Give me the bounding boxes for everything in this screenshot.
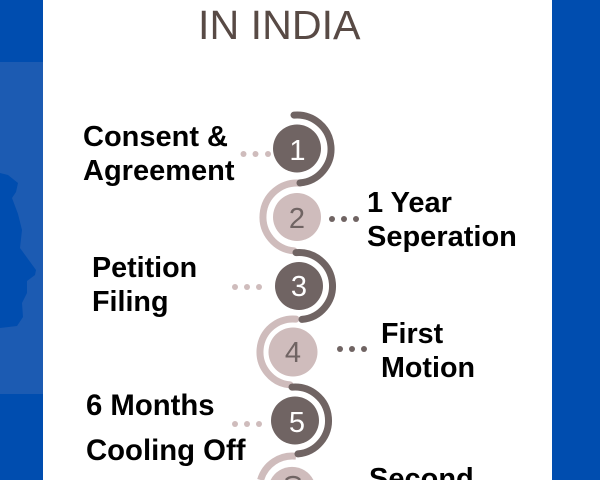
right blue background panel bbox=[552, 0, 600, 480]
step 6 arc bbox=[261, 456, 296, 480]
step 2 circle: 2 bbox=[289, 203, 305, 235]
dots step 4 bbox=[337, 346, 367, 352]
step 1 arc bbox=[294, 115, 331, 183]
dots step 2 bbox=[329, 216, 359, 222]
label: petition filing bbox=[92, 252, 197, 318]
label: consent and agreement: Agreement bbox=[83, 155, 234, 187]
label: 1 year separation: Seperation bbox=[367, 221, 517, 253]
step 2 arc bbox=[263, 183, 300, 251]
step 3 circle: 3 bbox=[291, 271, 307, 303]
label: first motion: Motion bbox=[381, 352, 475, 384]
step 3 arc bbox=[296, 252, 333, 319]
step 4 circle: 4 bbox=[285, 337, 301, 369]
dots step 1 bbox=[240, 151, 271, 157]
step 3 circle bbox=[275, 262, 323, 310]
title: IN INDIA bbox=[198, 2, 360, 48]
left photo panel with head silhouette bbox=[0, 62, 43, 394]
label: petition filing: Petition bbox=[92, 252, 197, 284]
label: 6 months cooling off: Cooling Off bbox=[86, 434, 245, 467]
left blue background panel bbox=[0, 0, 43, 480]
step 6 circle bbox=[271, 467, 313, 480]
step 1 circle bbox=[273, 124, 321, 172]
label: first motion: First bbox=[381, 318, 443, 350]
label: 6 months cooling off: 6 Months bbox=[86, 389, 215, 422]
label: 1 year separation bbox=[367, 187, 517, 253]
step 1 circle: 1 bbox=[289, 135, 306, 167]
step 4 arc bbox=[260, 319, 296, 385]
dots step 5 bbox=[232, 421, 262, 427]
label: 6 months cooling off bbox=[86, 389, 246, 467]
step 2 circle bbox=[273, 193, 321, 241]
dots step 3 bbox=[232, 284, 262, 290]
label: petition filing: Filing bbox=[92, 286, 168, 318]
label: consent and agreement: Consent & bbox=[83, 121, 228, 153]
step 5 circle: 5 bbox=[289, 407, 305, 439]
label: first motion bbox=[381, 318, 475, 384]
label: consent and agreement bbox=[83, 121, 234, 187]
step 5 arc bbox=[292, 387, 329, 454]
step 5 circle bbox=[271, 396, 319, 444]
label: 1 year separation: 1 Year bbox=[367, 187, 452, 219]
step 4 circle bbox=[268, 328, 318, 376]
